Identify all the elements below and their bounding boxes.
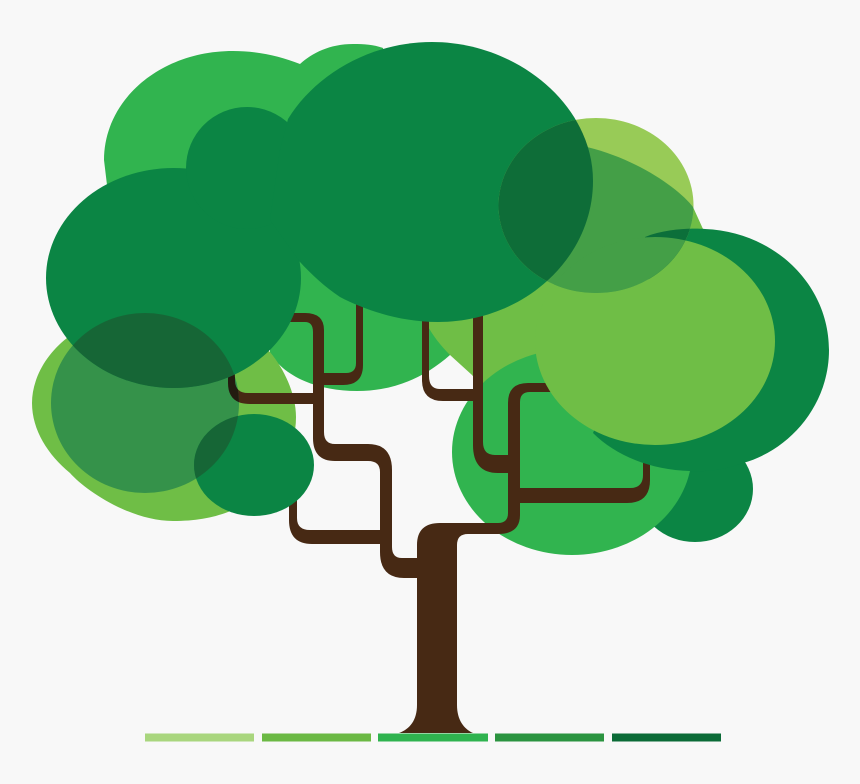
canopy: large left dark ellipse [46, 168, 301, 388]
canopy: dark upper-left bump [186, 107, 308, 229]
lower left twig [289, 500, 382, 544]
centre twig [422, 315, 475, 401]
upper middle-left twig [322, 300, 363, 385]
canopy: right dark crescent [593, 229, 829, 471]
trunk with right arm [399, 383, 555, 733]
canopy: back medium green foliage [104, 44, 450, 391]
colour scale bars [145, 734, 721, 742]
canopy: large right light green ellipse [535, 237, 775, 445]
tree trunk and branches [228, 300, 650, 733]
canopy: small lower left ellipse [194, 414, 314, 516]
canopy: back light green foliage [32, 147, 720, 521]
canopy: lower right foliage [452, 349, 753, 555]
far left twig [228, 370, 315, 404]
canopy: translucent upper right circle [498, 118, 694, 293]
overlap: left ellipses [73, 313, 234, 388]
right twig [518, 450, 650, 503]
canopy: main top dark shape [270, 42, 593, 322]
centre right branch [473, 310, 510, 473]
canopy: translucent left ellipse [51, 346, 239, 493]
left main branch [285, 313, 420, 578]
